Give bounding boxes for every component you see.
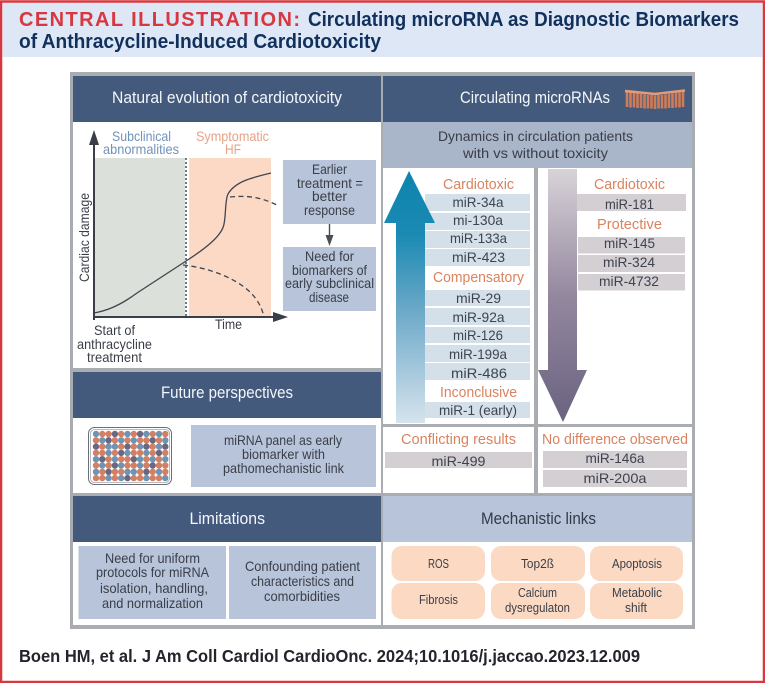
group: downregulated microRNAs [577, 176, 686, 290]
citation: Boen HM, et al. J Am Coll Cardiol CardioOnc. 2024;10.1016/j.jaccao.2023.12.009 [19, 646, 640, 666]
pill: calcium dysregulation: dysregulaton [505, 600, 570, 615]
heading: mechanistic links: Mechanistic links [481, 510, 596, 528]
group: no difference observed: miR-200a [584, 470, 647, 486]
pill: calcium dysregulation [491, 583, 585, 619]
group: downregulated microRNAs: Protective [597, 216, 662, 233]
pill: calcium dysregulation: Calcium [518, 585, 557, 600]
limitation: uniform protocols: and normalization [102, 595, 203, 611]
group: upregulated microRNAs: mi-130a [453, 212, 503, 228]
heading: future perspectives: Future perspectives [161, 384, 293, 402]
chart: cardiac damage over time: Subclinical [112, 128, 171, 144]
limitation: uniform protocols: isolation, handling, [100, 580, 208, 596]
heading: limitations: Limitations [190, 510, 265, 528]
callout: miRNA panel: miRNA panel as early [224, 432, 342, 448]
group: no difference observed [542, 431, 688, 487]
title [19, 8, 739, 53]
group: conflicting results: Conflicting results [401, 431, 516, 448]
header band [2, 3, 762, 57]
group: downregulated microRNAs: miR-324 [603, 254, 655, 270]
group: upregulated microRNAs [425, 176, 530, 418]
group: downregulated microRNAs: miR-145 [604, 235, 655, 251]
group: no difference observed: miR-146a [586, 450, 645, 466]
limitation: confounding characteristics: comorbidities [264, 588, 340, 604]
callout: earlier treatment: better [312, 188, 347, 204]
callout: miRNA panel [191, 425, 376, 487]
group: conflicting results [385, 431, 532, 469]
group: upregulated microRNAs: Inconclusive [440, 384, 517, 401]
pill: ROS: ROS [428, 556, 449, 571]
group: upregulated microRNAs: miR-126 [453, 327, 503, 343]
callout: earlier treatment: treatment = [297, 175, 363, 191]
chart: cardiac damage over time: anthracycline [77, 336, 152, 352]
callout: need for biomarkers: biomarkers of [292, 262, 367, 278]
heading: natural evolution: Natural evolution of cardiotoxicity [112, 89, 343, 107]
limitation: confounding characteristics [229, 546, 376, 619]
group: upregulated microRNAs: miR-133a [450, 230, 507, 246]
subheading: dynamics in circulation: Dynamics in circulation patients [438, 128, 633, 144]
main grid frame [70, 72, 695, 629]
pill: metabolic shift [590, 583, 683, 619]
group: downregulated microRNAs: Cardiotoxic [594, 176, 665, 193]
chart: cardiac damage over time [76, 128, 288, 365]
arrow: up [384, 171, 435, 423]
title: Circulating microRNA as Diagnostic Biomarkers [308, 8, 739, 31]
icon: microRNA strand [625, 90, 685, 109]
panel: future perspectives [73, 372, 381, 493]
group: upregulated microRNAs: miR-29 [456, 290, 501, 306]
group: upregulated microRNAs: Compensatory [433, 269, 524, 286]
icon: miRNA well plate [88, 428, 172, 484]
pill: apoptosis [590, 546, 683, 581]
limitation: uniform protocols: protocols for miRNA [96, 564, 210, 580]
group: downregulated microRNAs: miR-181 [605, 196, 654, 212]
title: of Anthracycline-Induced Cardiotoxicity [19, 30, 382, 53]
callout: need for biomarkers [283, 247, 376, 311]
group: upregulated microRNAs: Cardiotoxic [443, 176, 514, 193]
chart: cardiac damage over time: Time [215, 316, 242, 332]
subheading: dynamics in circulation: with vs without toxicity [462, 145, 608, 161]
panel: mechanistic links [383, 496, 692, 625]
arrow: to need for biomarkers [326, 224, 334, 246]
title: CENTRAL ILLUSTRATION: [19, 9, 300, 31]
group: upregulated microRNAs: miR-423 [452, 249, 505, 265]
callout: miRNA panel: biomarker with [242, 446, 325, 462]
chart: cardiac damage over time: treatment [87, 349, 142, 365]
pill: ROS [392, 546, 485, 581]
limitation: uniform protocols [78, 546, 226, 619]
limitation: uniform protocols: Need for uniform [105, 550, 200, 566]
callout: need for biomarkers: early subclinical [285, 275, 374, 291]
pill: metabolic shift: Metabolic [612, 585, 662, 600]
pill: fibrosis [392, 583, 485, 619]
chart: cardiac damage over time: abnormalities [103, 141, 179, 157]
pill: Top2ß: Top2ß [521, 556, 554, 571]
callout: earlier treatment: Earlier [312, 161, 347, 177]
group: upregulated microRNAs: miR-486 [451, 365, 507, 381]
pill: Top2ß [491, 546, 585, 581]
panel: circulating microRNAs [383, 76, 692, 493]
limitation: confounding characteristics: characteristics and [251, 573, 354, 589]
group: upregulated microRNAs: miR-92a [452, 309, 505, 325]
callout: earlier treatment: response [304, 202, 355, 218]
group: no difference observed: No difference observed [542, 431, 688, 448]
chart: cardiac damage over time: Cardiac damage [76, 193, 92, 282]
panel: limitations [73, 496, 381, 625]
callout: need for biomarkers: disease [309, 289, 349, 305]
chart: cardiac damage over time: Symptomatic [196, 128, 269, 144]
pill: fibrosis: Fibrosis [419, 592, 458, 607]
subheading: dynamics in circulation [383, 122, 692, 168]
heading: circulating microRNAs: Circulating microRNAs [460, 89, 610, 107]
panel: natural evolution of cardiotoxicity [73, 76, 381, 368]
chart: cardiac damage over time: Start of [94, 322, 135, 338]
group: conflicting results: miR-499 [432, 453, 486, 469]
group: downregulated microRNAs: miR-4732 [599, 273, 659, 289]
limitation: confounding characteristics: Confounding patient [245, 558, 360, 574]
callout: miRNA panel: pathomechanistic link [223, 460, 345, 476]
group: upregulated microRNAs: miR-1 (early) [439, 402, 517, 418]
chart: cardiac damage over time: HF [225, 141, 241, 157]
arrow: down [538, 169, 587, 422]
callout: need for biomarkers: Need for [305, 248, 354, 264]
group: upregulated microRNAs: miR-34a [452, 194, 504, 210]
pill: apoptosis: Apoptosis [612, 556, 662, 571]
callout: earlier treatment [283, 160, 376, 224]
pill: metabolic shift: shift [625, 600, 647, 615]
group: upregulated microRNAs: miR-199a [449, 346, 507, 362]
